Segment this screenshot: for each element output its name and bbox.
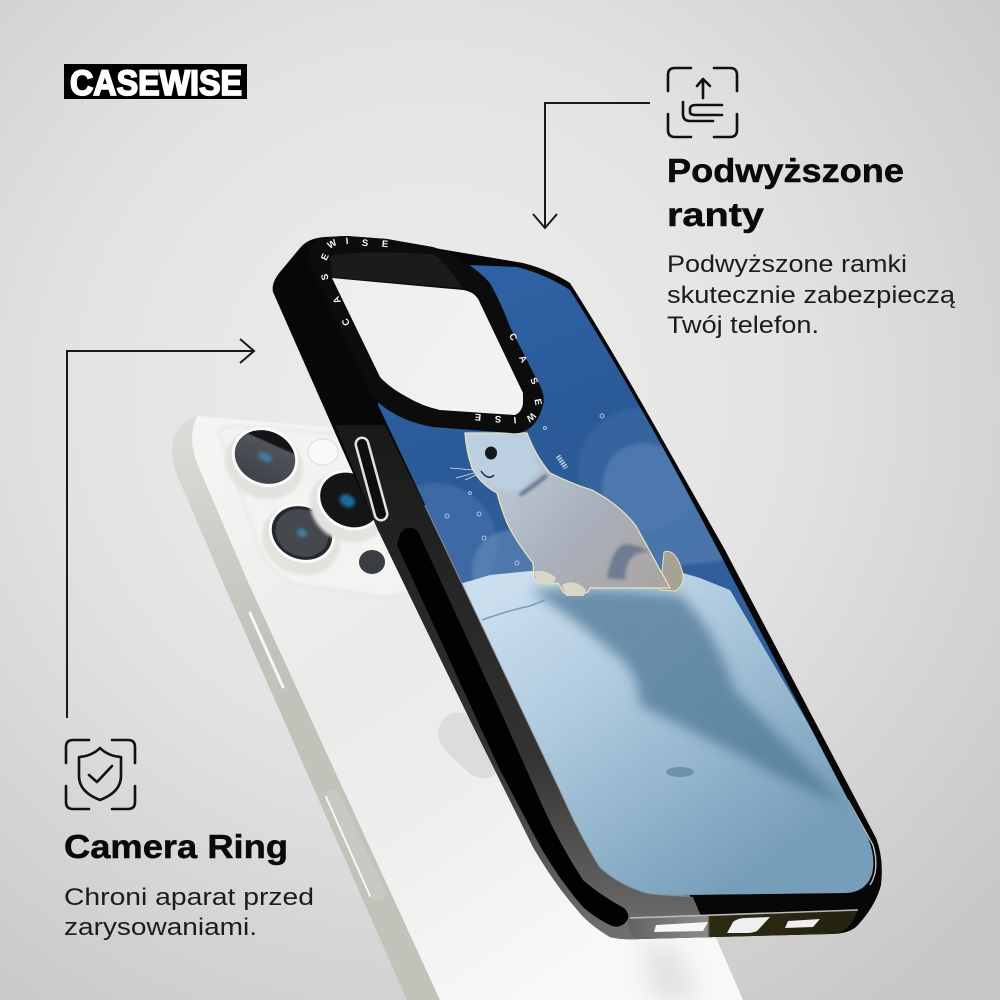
ring lettering: E — [319, 252, 332, 262]
sky glow: right bubble — [602, 443, 730, 570]
side button lower highlight — [326, 797, 370, 896]
sky glow: left — [416, 483, 496, 583]
logo box — [64, 64, 247, 99]
tracks — [666, 767, 694, 777]
ring lettering: E — [474, 411, 482, 422]
night sky — [378, 265, 874, 895]
text: raised edges description: Twój telefon. — [667, 312, 819, 339]
white phone — [172, 415, 743, 1000]
ring lettering: E — [381, 239, 389, 250]
icon: shield — [66, 740, 135, 809]
heading: raised edges: Podwyższone — [667, 152, 904, 189]
ring lettering: I — [345, 236, 349, 247]
snow crack — [482, 600, 545, 620]
case artwork — [378, 265, 874, 895]
lens right — [297, 456, 401, 557]
ring lettering: A — [516, 354, 529, 365]
seal shadow — [530, 588, 845, 805]
side button lower — [333, 797, 378, 893]
ring lettering — [319, 236, 543, 425]
ring lettering: S — [495, 413, 501, 424]
port: usb-c — [727, 917, 770, 933]
arrow: camera ring — [67, 339, 254, 718]
ring lettering: C — [506, 332, 519, 343]
frame lower left strip — [335, 425, 710, 939]
flash — [308, 439, 338, 465]
seal tail — [660, 551, 683, 591]
ring lettering: A — [331, 294, 344, 305]
black band bottom — [693, 880, 872, 914]
seal mouth — [481, 471, 494, 477]
seal body — [465, 433, 670, 595]
phone side band — [172, 416, 440, 1000]
ring lettering: S — [320, 273, 331, 281]
frame side slot — [397, 528, 628, 927]
edge highlight lower right — [848, 800, 876, 885]
arrow: raised edges — [533, 103, 650, 228]
ring lettering: S — [361, 238, 369, 249]
frame bottom lip — [628, 909, 858, 939]
ring lettering: I — [513, 414, 517, 425]
case frame — [273, 236, 882, 939]
side button upper — [250, 613, 283, 687]
apple logo — [438, 712, 500, 778]
signature — [558, 456, 566, 468]
side button cutout — [362, 444, 381, 514]
seal back leg — [607, 544, 650, 580]
art edge highlight — [425, 505, 690, 896]
camera ring — [309, 236, 544, 433]
text: raised edges description: Podwyższone ramki — [667, 251, 907, 278]
port: speaker left — [654, 922, 708, 932]
seal whiskers — [450, 468, 476, 480]
logo — [64, 64, 247, 103]
sky glow: outer right — [580, 408, 692, 501]
ring body — [309, 236, 544, 433]
lens bottom — [251, 491, 352, 588]
ring lettering: W — [326, 237, 339, 251]
snow — [462, 571, 874, 895]
logo text: CASEWISE — [70, 64, 242, 103]
seal eye — [485, 446, 497, 460]
heading: raised edges: ranty — [667, 196, 765, 233]
text: camera ring description — [64, 884, 314, 941]
heading: raised edges — [667, 152, 904, 233]
ring window — [332, 278, 523, 415]
ring lettering: S — [527, 376, 540, 386]
ring inner wall — [330, 253, 463, 288]
heading: camera ring: Camera Ring — [64, 828, 288, 865]
black case — [273, 236, 882, 939]
ring lettering: C — [340, 316, 353, 327]
seal — [450, 433, 683, 596]
lidar — [359, 550, 385, 574]
sky glow: lower left — [472, 529, 533, 580]
text: raised edges description: skutecznie zabezpieczą — [667, 282, 956, 309]
seal head — [467, 434, 540, 490]
phone back — [189, 416, 743, 1000]
text: raised edges description — [667, 251, 956, 339]
snowflakes — [445, 414, 604, 565]
highlight along bottom — [630, 910, 858, 918]
lower phone shadow — [640, 945, 700, 1000]
seal paws — [534, 571, 586, 596]
ring lettering: W — [524, 410, 538, 424]
port: speaker right — [785, 919, 820, 928]
ring lettering: E — [532, 398, 543, 406]
icon: raised edge — [668, 68, 737, 137]
text: camera ring description: Chroni aparat przed — [64, 884, 314, 911]
camera plateau — [219, 426, 420, 597]
text: camera ring description: zarysowaniami. — [64, 914, 257, 941]
lens top — [214, 415, 315, 512]
seal neck shade — [520, 475, 547, 495]
